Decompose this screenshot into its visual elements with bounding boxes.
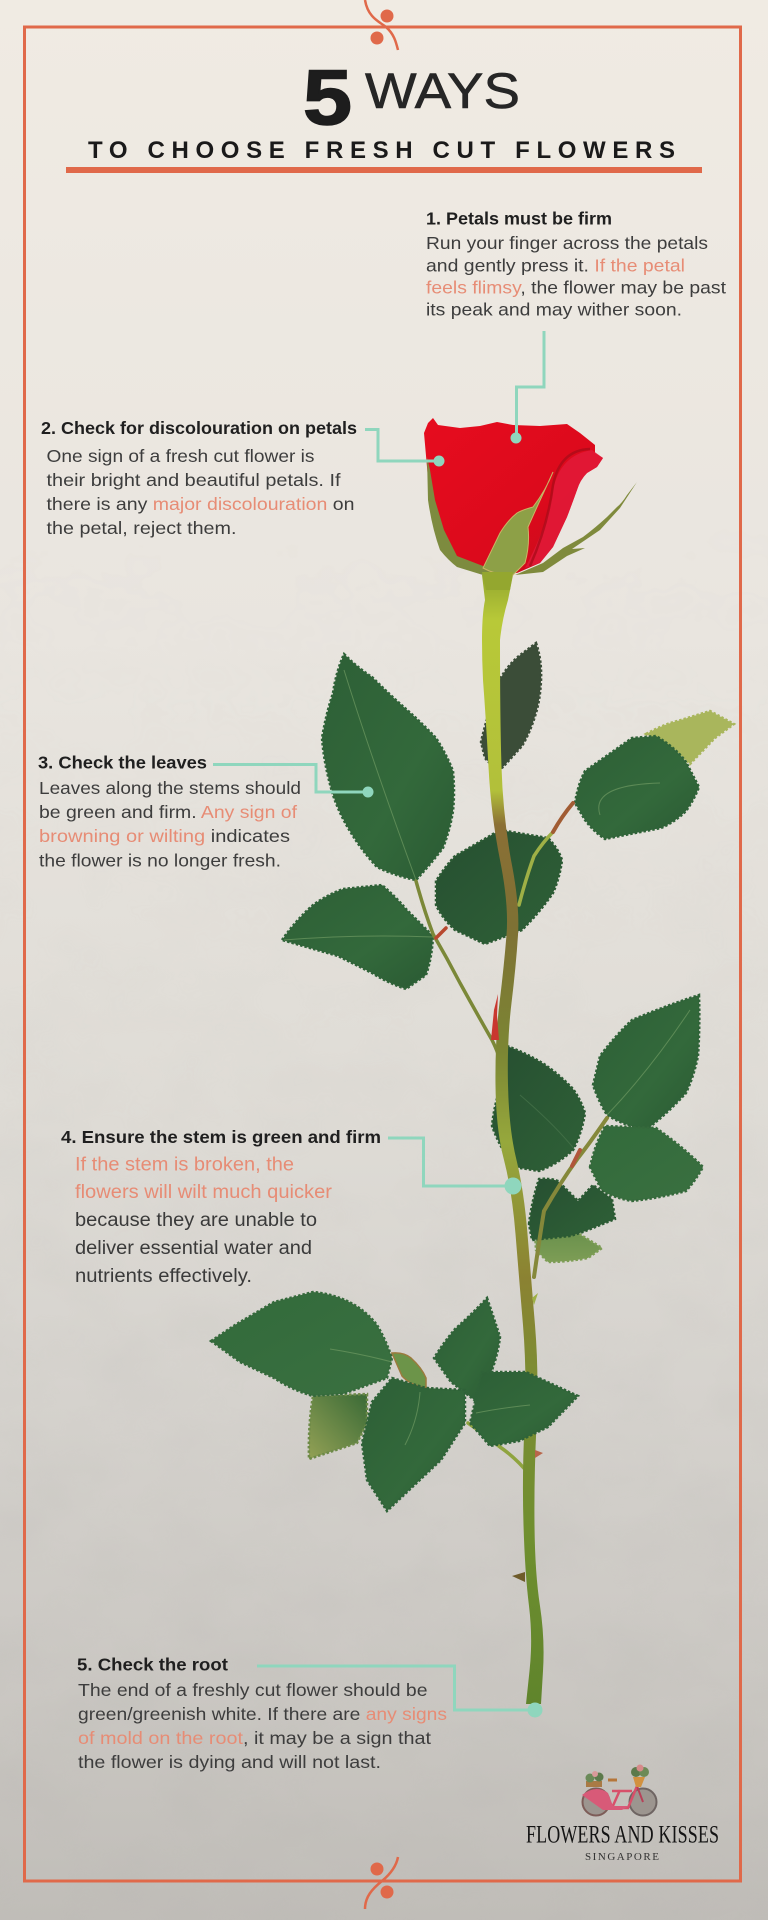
dot 4: [504, 1178, 522, 1194]
heading 1: 1. Petals must be firm: [426, 208, 612, 228]
sepal: centre: [483, 472, 553, 575]
petal shadow: [525, 450, 603, 568]
body 4: nutrients effectively.: [75, 1266, 252, 1287]
leaf: below stem joint: [492, 1046, 585, 1171]
brand location: SINGAPORE: [585, 1851, 659, 1863]
dot 2: [434, 456, 444, 466]
leaf: right middle: [590, 1126, 703, 1201]
heading 5: 5. Check the root: [77, 1654, 228, 1674]
numeral 5: 5: [303, 53, 352, 141]
title: [66, 53, 702, 173]
leaf: lower cluster right: [470, 1372, 578, 1446]
logo: [526, 1764, 719, 1863]
sepal: left: [427, 457, 500, 575]
leaf: upper right: [575, 736, 699, 839]
branches: [416, 803, 607, 1474]
word WAYS: WAYS: [365, 63, 520, 119]
callout 5: root: [77, 1654, 542, 1772]
title underline: [66, 167, 702, 173]
body 5: of mold on the root , it may be a sign that: [78, 1728, 431, 1748]
thorns: [491, 994, 543, 1582]
body 2: their bright and beautiful petals. If: [46, 470, 341, 490]
dot 1: [510, 432, 522, 444]
body 5: The end of a freshly cut flower should be: [78, 1680, 428, 1700]
connector 1: [516, 331, 544, 438]
body 4: [75, 1154, 333, 1287]
bloom: [424, 418, 603, 573]
body 2: One sign of a fresh cut flower is: [46, 446, 315, 466]
sepal: right whisker: [515, 482, 637, 575]
heading 4: 4. Ensure the stem is green and firm: [61, 1127, 381, 1147]
leaf: lower cluster top right: [434, 1298, 500, 1402]
bud: [392, 1353, 426, 1388]
body 1: feels flimsy , the flower may be past: [426, 278, 726, 298]
body 1: its peak and may wither soon.: [426, 300, 682, 320]
body 1: [426, 233, 726, 320]
dot 3: [362, 786, 374, 798]
leaf: dark behind stem: [481, 643, 541, 771]
connector 4: [388, 1138, 510, 1186]
body 3: [39, 778, 301, 870]
body 2: there is any major discolouration on: [46, 494, 355, 514]
body 2: [46, 446, 355, 538]
body 1: and gently press it. If the petal: [426, 256, 685, 276]
leaf: lower left of branch: [282, 885, 433, 989]
body 5: green/greenish white. If there are any signs: [78, 1704, 447, 1724]
connector 2: [365, 430, 438, 461]
body 1: Run your finger across the petals: [426, 233, 708, 253]
leaf: lower cluster olive: [309, 1394, 367, 1459]
connector 3: [213, 764, 368, 792]
body 4: because they are unable to: [75, 1210, 317, 1231]
body 4: If the stem is broken, the: [75, 1154, 294, 1176]
leaf: lower olive part: [534, 1215, 602, 1262]
top ornament: [365, 0, 398, 50]
leaf: lower right big: [593, 995, 699, 1130]
heading 3: 3. Check the leaves: [38, 752, 207, 772]
leaf: big upper left: [322, 654, 454, 880]
heading 2: 2. Check for discolouration on petals: [41, 418, 357, 438]
connector 5: [257, 1666, 530, 1710]
body 5: the flower is dying and will not last.: [78, 1752, 381, 1772]
body 3: the flower is no longer fresh.: [39, 850, 281, 870]
leaf: lower cluster big left: [211, 1292, 392, 1396]
callout 4: stem: [61, 1127, 522, 1287]
body 3: browning or wilting indicates: [39, 826, 290, 846]
leaf: lower cluster centre: [362, 1378, 465, 1511]
subtitle: TO CHOOSE FRESH CUT FLOWERS: [88, 137, 675, 164]
body 5: [78, 1680, 447, 1772]
body 4: flowers will wilt much quicker: [75, 1182, 333, 1203]
stem: [482, 575, 544, 1704]
petal fold: [530, 449, 590, 566]
body 3: be green and firm. Any sign of: [39, 802, 297, 822]
icon: bicycle with flowers: [582, 1764, 656, 1816]
rose illustration: [211, 418, 734, 1704]
callout 2: discolouration: [41, 418, 444, 538]
dot 5: [528, 1702, 542, 1718]
body 3: Leaves along the stems should: [39, 778, 301, 798]
leaf: small middle: [529, 1179, 615, 1240]
body 4: deliver essential water and: [75, 1238, 312, 1259]
bottom ornament: [365, 1857, 398, 1909]
callout 1: petals firm: [426, 208, 726, 444]
leaf: yellow green tip: [646, 711, 734, 764]
body 2: the petal, reject them.: [46, 518, 236, 538]
rose calyx: [482, 572, 513, 590]
brand name: FLOWERS AND KISSES: [526, 1821, 719, 1848]
callout 3: leaves: [38, 752, 374, 870]
leaf: centre: [436, 830, 562, 944]
